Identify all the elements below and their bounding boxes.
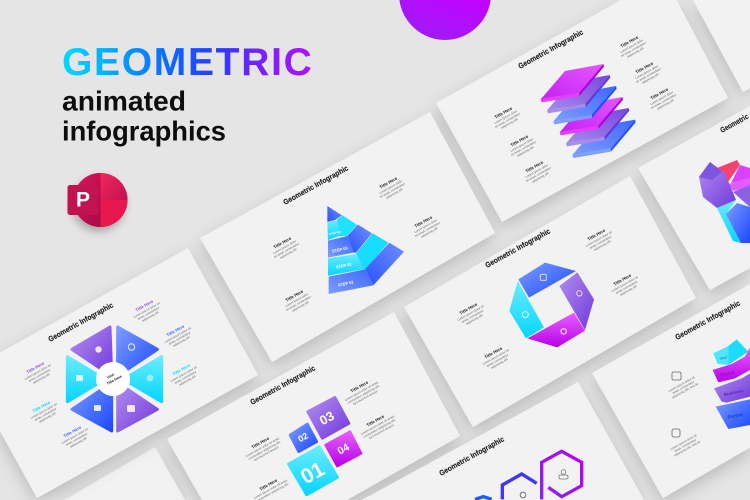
heading: octagon slide: Geometric Infographic [484,226,552,270]
text block: sit amet, consectetur [620,41,647,58]
text block: Title Here [525,159,545,174]
text block [506,132,539,160]
text block: amet, consectetur [137,306,160,321]
slide: top-right blank [693,0,750,92]
text block: Title Here [613,272,633,287]
text block: sit amet, consectetur [494,112,521,129]
text block: Lorem ipsum dolor sit amet, [360,414,395,436]
text block: sed eiusmod tempor [352,389,379,406]
text block: Title Here [166,323,186,338]
icon: people [672,372,681,380]
number 03: 03 [317,408,337,428]
text block: adipiscing elit [141,310,159,323]
text block: adipiscing elit [291,300,309,313]
number 02: 02 [296,431,310,444]
text block: consectetur adipiscing elit, [248,440,281,461]
text block: adipiscing elit, sed do [671,382,699,400]
text block: adipiscing elit [531,171,549,184]
text block: amet, consectetur [674,438,697,453]
text block: Lorem ipsum dolor sit [30,402,58,420]
icon: hand [94,405,101,411]
text block: Lorem ipsum dolor sit amet, [344,380,379,402]
text block [130,296,164,325]
text block: adipiscing elit [172,335,190,348]
text block: Lorem ipsum dolor sit [585,230,613,248]
text block: Title Here [620,34,640,49]
text block: Lorem ipsum dolor [379,179,403,195]
icon: PowerPoint logo [68,173,128,227]
text block: Title Here [135,298,155,313]
text block: amet, consectetur [28,368,51,383]
text block: Lorem ipsum dolor sit [611,275,639,293]
3D cylinders chart [699,160,750,243]
text block: Title Here [32,399,52,414]
text block: sit amet, consectetur [635,67,662,84]
text block: Lorem ipsum dolor sit amet, [253,478,288,500]
text block: Lorem ipsum dolor sit [133,301,161,319]
text block: Title Here [172,362,192,377]
text block: adipiscing elit [656,98,674,111]
text block: sit amet, consectetur [510,140,537,157]
heading: layers slide: Geometric Infographic [517,27,585,71]
text block [646,85,679,113]
text block: Lorem ipsum dolor [620,38,644,54]
number 01: 01 [297,457,329,489]
text block: Lorem ipsum dolor sit [24,363,52,381]
slide: 3D shapes panel [638,106,750,290]
slide: stacked boxes panel [592,284,750,498]
step labels: STEP 03 [331,245,349,254]
text block: amet, consectetur [615,280,638,295]
text block: Title Here [459,301,479,316]
box labels: Startup [720,370,735,377]
text block: adipiscing elit [32,372,50,385]
text block [375,174,408,202]
text block [58,422,92,451]
icon: PowerPoint logo: P [76,188,90,212]
centre circle: Title Here [106,374,123,386]
text block: adipiscing elit [69,436,87,449]
text block: adipiscing elit [490,357,508,370]
box labels: Business [723,388,744,397]
text block [582,225,616,254]
centre circle [96,362,130,396]
subheading line 2: infographics [62,116,226,146]
text block [454,299,488,328]
icon: people [127,405,135,412]
text block [479,343,513,372]
text block: sit amet, consectetur [414,221,441,238]
text block: Lorem ipsum dolor [650,90,674,106]
text block: Title Here [251,435,271,450]
step labels: STEP 04 [329,230,341,236]
text block: Title Here [494,105,514,120]
text block [668,375,699,400]
text block: amet, consectetur [174,370,197,385]
heading: pyramid slide: Geometric Infographic [282,163,350,207]
text block: Lorem ipsum dolor sit [457,304,485,322]
text block: Title Here [635,60,655,75]
text block [242,431,284,465]
text block: adipiscing elit [279,247,297,260]
text block: Lorem ipsum dolor [414,218,438,234]
text block: adipiscing elit [500,117,518,130]
text block [410,213,443,241]
text block [281,287,314,315]
text block: adipiscing elit [178,374,196,387]
number 04: 04 [336,441,352,457]
text block: Lorem ipsum dolor sit [482,348,510,366]
text block: Lorem ipsum dolor sit amet, [245,436,280,458]
text block: amet, consectetur [486,353,509,368]
text block: Title Here [484,345,504,360]
slide: squares panel [167,312,460,500]
text block: Lorem ipsum dolor sit [668,375,696,393]
slide: octagon panel [404,176,696,427]
text block: Lorem ipsum dolor [525,163,549,179]
text block: amet, consectetur [34,407,57,422]
text block [490,104,523,132]
decorative circle [399,0,491,40]
text block: sit amet, consectetur [650,93,677,110]
heading: hexagons slide: Geometric Infographic [438,434,506,478]
text block: amet, consectetur [589,235,612,250]
icon: chart [76,375,83,381]
icon: gear [520,492,526,498]
text block: adipiscing elit [420,226,438,239]
text block: adipiscing elit [516,145,534,158]
text block: Title Here [366,413,386,428]
icon: cycle [128,344,135,350]
text block: Lorem ipsum dolor sit [61,427,89,445]
text block: adipiscing elit [641,72,659,85]
text block [608,270,642,299]
box labels: Partne [727,412,744,421]
text block: amet, consectetur [461,309,484,324]
heading: boxes slide: Geometric Infographic [674,298,742,342]
text block: amet, consectetur [672,380,695,395]
heading: squares slide: Geometric Infographic [249,363,317,407]
text block [161,321,195,350]
octagon ribbon chart [509,263,594,347]
icon: box [672,429,680,437]
text block [616,33,649,61]
text block: Lorem ipsum dolor sit [164,326,192,344]
text block [27,397,61,426]
text block: Title Here [379,175,399,190]
text block: Lorem ipsum dolor sit [670,433,698,451]
text block: Lorem ipsum dolor [285,292,309,308]
text block: sit amet, consectetur [273,242,300,259]
slide: pyramid panel [200,112,495,362]
step labels [329,230,355,288]
text block: adipiscing elit [619,284,637,297]
text block: sit amet, consectetur [525,166,552,183]
text block: amet, consectetur [168,331,191,346]
text block: adipiscing elit [465,313,483,326]
text block: Title Here [650,86,670,101]
text block: adipiscing elit [593,239,611,252]
text block: Title Here [285,288,305,303]
text block: Title Here [414,214,434,229]
slide: layers panel [436,0,728,222]
slide: hexagons panel [362,382,644,500]
step labels: STEP 02 [335,261,353,270]
text block: adipiscing elit [385,187,403,200]
text block [521,158,554,186]
slide: bottom-left blank [64,447,185,500]
text block [357,409,399,443]
text block: Lorem ipsum dolor [273,239,297,255]
text block: Title Here [63,424,83,439]
box labels [719,355,744,421]
text block [21,358,55,387]
text block: sed eiusmod tempor [368,423,395,440]
text block: Lorem ipsum dolor [510,137,534,153]
numbered squares chart [288,397,361,495]
slide: hexagon panel [0,248,258,498]
icon: target [146,374,154,382]
text block [631,59,664,87]
hexagon segments chart [67,327,162,431]
heading: GEOMETRIC: GEOMETRIC [62,41,313,84]
text block [670,433,701,458]
text block: Title Here [350,379,370,394]
stacked boxes chart [713,339,750,429]
text block: consectetur adipiscing elit, [347,384,380,405]
text block: consectetur adipiscing elit, [363,418,396,439]
step labels: STEP 01 [337,279,355,288]
text block: Title Here [510,133,530,148]
centre circle: Your [106,372,116,380]
stacked layers chart [541,64,636,158]
icon: bulb [95,346,102,353]
text block: Title Here [259,477,279,492]
text block: sit amet, consectetur [379,182,406,199]
text block: adipiscing elit [38,411,56,424]
text block [167,360,201,389]
pyramid chart [327,206,404,294]
box labels: Goal [719,355,728,361]
text block: sit amet, consectetur [285,295,312,312]
heading: hexagon slide: Geometric Infographic [47,300,115,344]
text block: adipiscing elit, sed do [673,440,701,458]
icon: person [559,470,568,479]
text block: sed eiusmod tempor [253,445,280,462]
text block: adipiscing elit [626,46,644,59]
subheading line 1: animated [62,86,186,116]
text block [269,234,302,262]
text block: Title Here [26,360,46,375]
text block: Lorem ipsum dolor sit [170,365,198,383]
text block: Title Here [587,227,607,242]
text block: Title Here [273,235,293,250]
hexagon outlines chart [475,451,582,499]
text block: Lorem ipsum dolor [635,64,659,80]
text block: amet, consectetur [65,432,88,447]
text block [341,375,383,409]
text block: Lorem ipsum dolor [494,109,518,125]
